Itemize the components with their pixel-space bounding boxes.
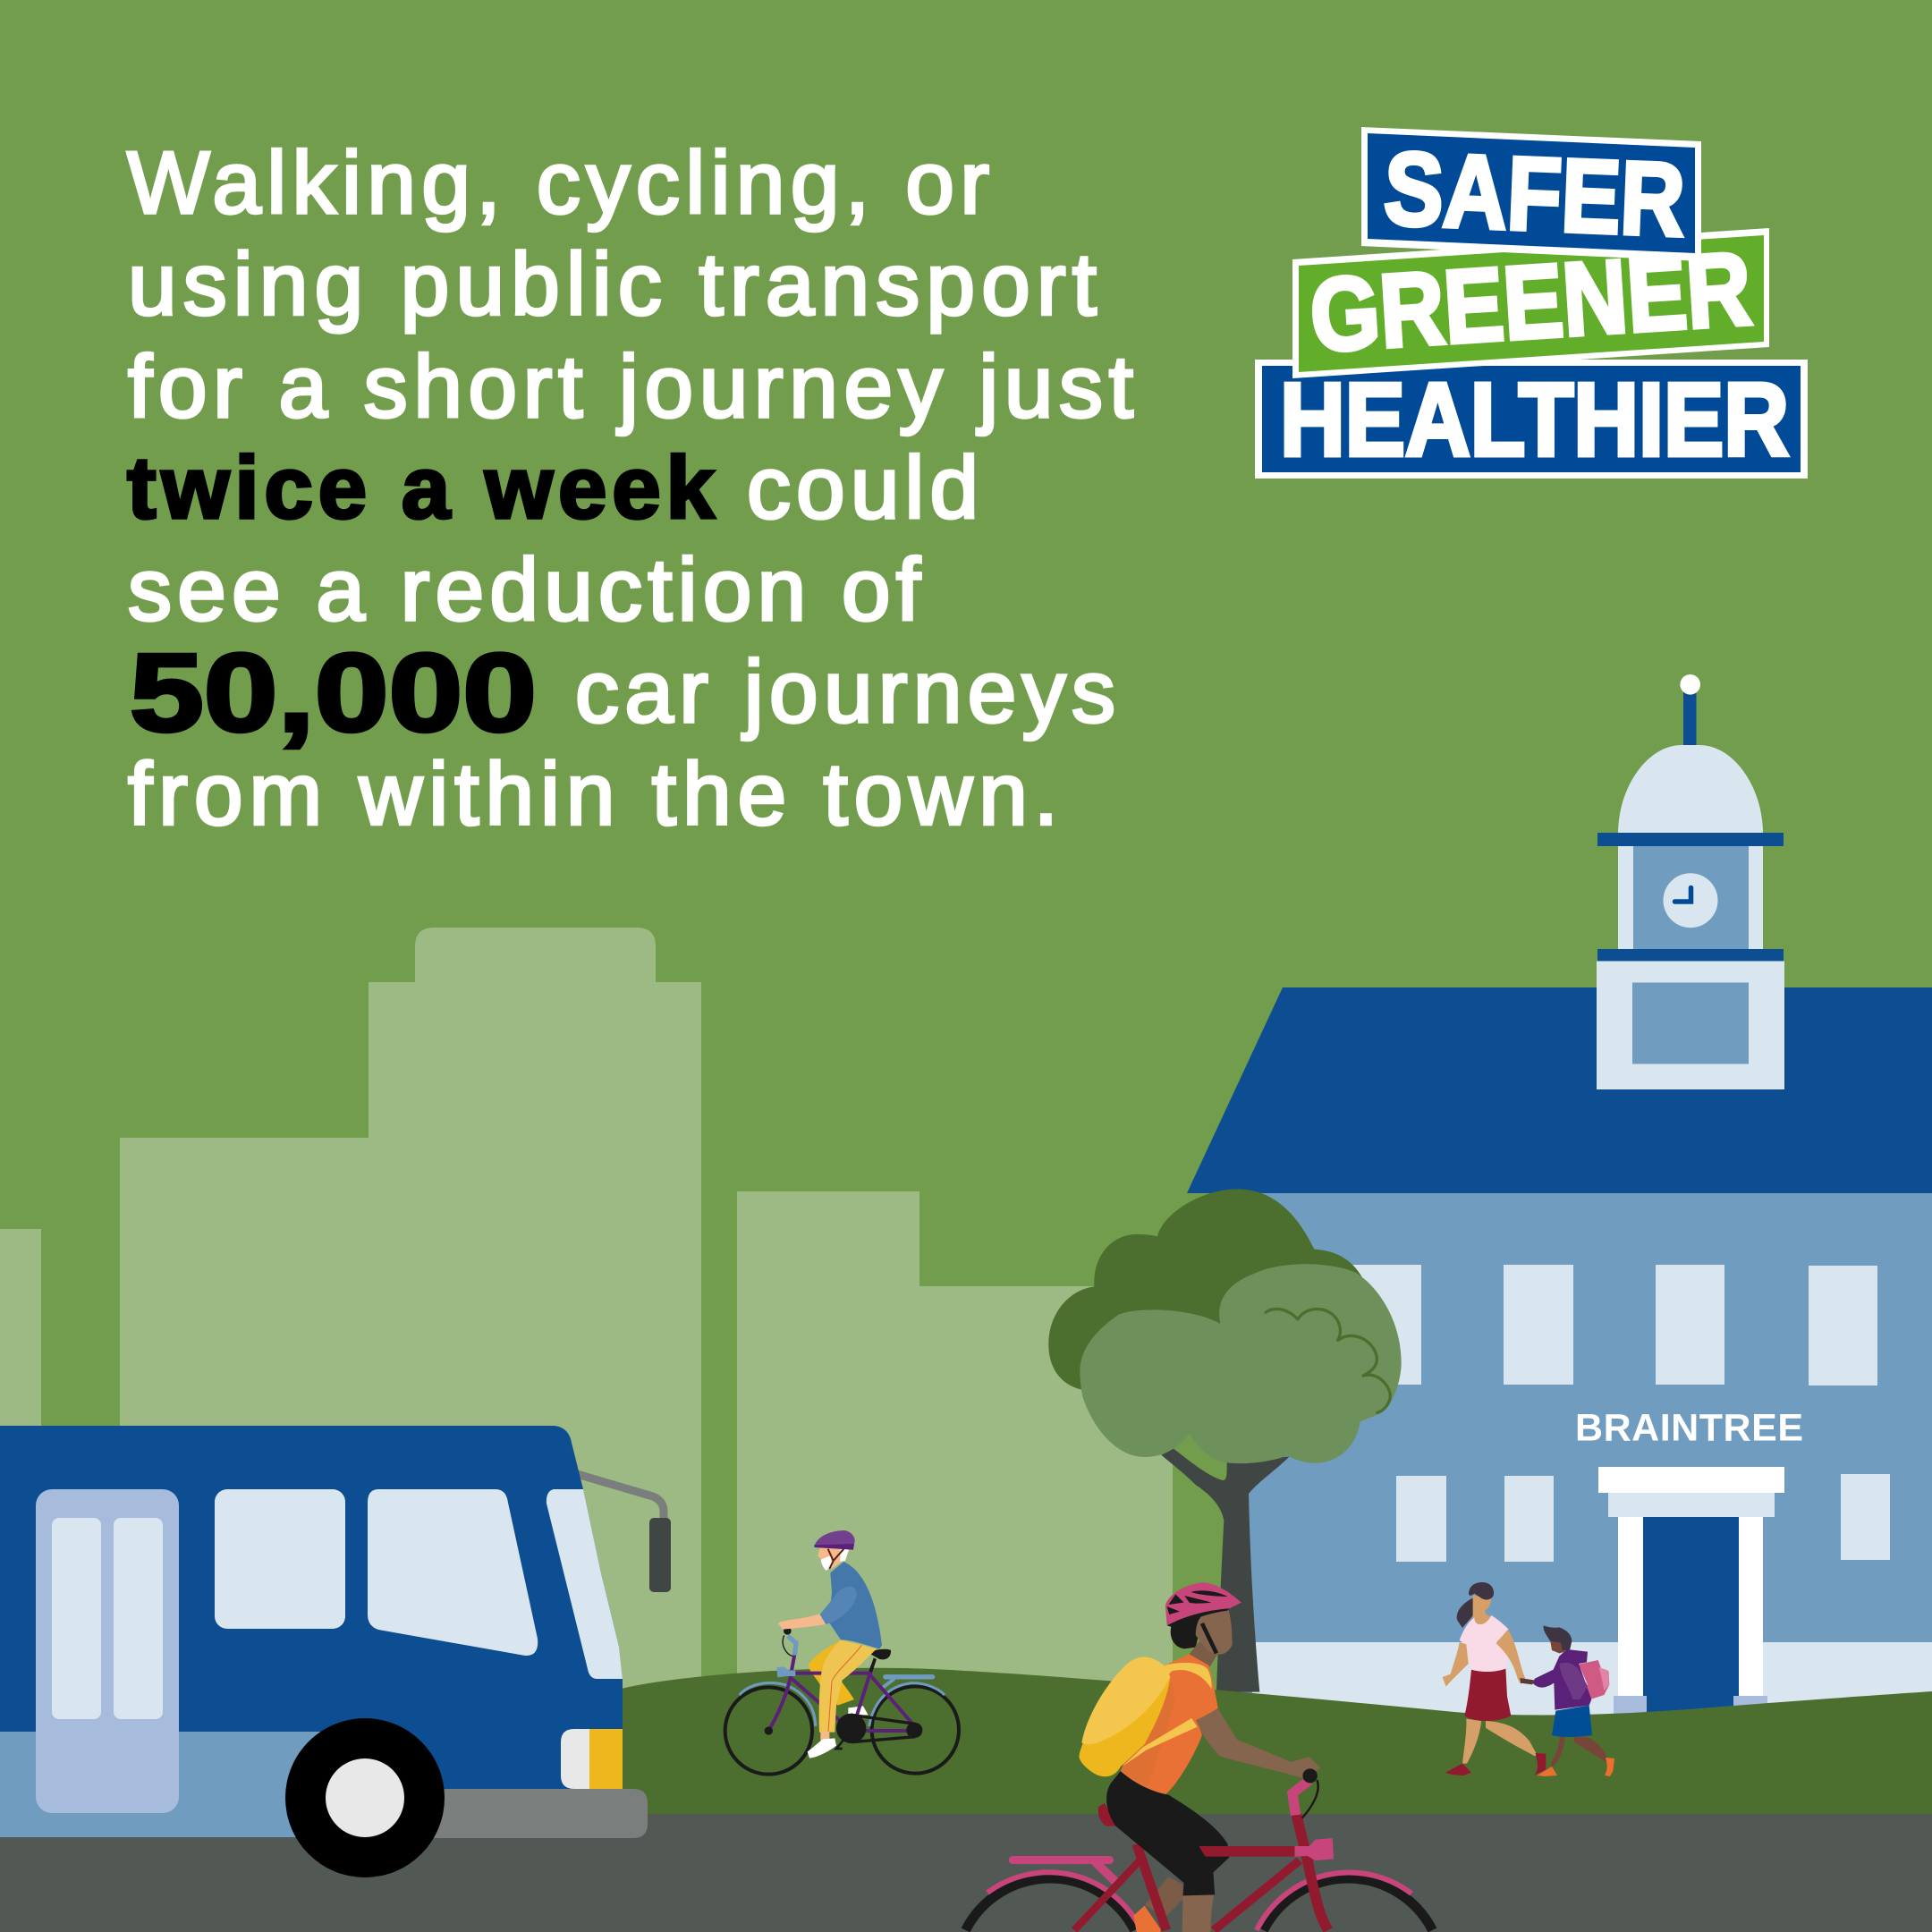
- bus mirror: [577, 1474, 671, 1592]
- clock tower dome: [1618, 745, 1763, 834]
- bike fork and handlebar: [1292, 1780, 1328, 1930]
- logo banner: greener: GREENER: [1307, 230, 1754, 374]
- bike saddle: [869, 1649, 891, 1673]
- logo banner: safer: SAFER: [1382, 130, 1687, 258]
- grip: [1302, 1768, 1318, 1783]
- bike fenders and rack: [740, 1676, 945, 1726]
- building wall: [1239, 1193, 1932, 1730]
- background city skyline: [0, 928, 1173, 1816]
- bike fenders: [987, 1872, 1411, 1930]
- far shoe: [1133, 1906, 1160, 1932]
- roof: [1187, 987, 1932, 1193]
- near leg: [1182, 1894, 1214, 1932]
- ankle: [820, 1732, 829, 1741]
- bus door: [36, 1489, 179, 1813]
- near leg: [819, 1640, 877, 1733]
- backpack: [1079, 1657, 1212, 1776]
- bike saddle: [1098, 1803, 1117, 1826]
- road: [0, 1814, 1932, 1932]
- light foliage: [1080, 1264, 1402, 1463]
- headline line 7: from within the town.: [128, 744, 1058, 843]
- bus headlight: [561, 1729, 623, 1789]
- face: [1196, 1609, 1233, 1655]
- trouser seam: [828, 1645, 861, 1732]
- foliage outline detail: [1266, 1309, 1390, 1412]
- cyclist in background: [725, 1530, 959, 1775]
- far leg: [1145, 1877, 1182, 1917]
- bus wheel: [285, 1718, 445, 1877]
- lower windows: [1396, 1474, 1890, 1562]
- headline line 3: for a short journey just: [128, 337, 1133, 436]
- building name: BRAINTREE: [1575, 1406, 1803, 1449]
- arm: [1196, 1709, 1320, 1778]
- sleeve: [820, 1587, 857, 1624]
- shorts: [1106, 1771, 1229, 1895]
- helmet strap: [1202, 1623, 1216, 1653]
- emphasis: twice a week: twice a week: [127, 438, 715, 537]
- bus windscreen: [547, 1489, 623, 1679]
- grass hill: [617, 1668, 1932, 1825]
- bus front window: [368, 1489, 538, 1656]
- helmet: [1165, 1582, 1241, 1628]
- bike drivetrain: [765, 1714, 922, 1749]
- tree trunk: [1161, 1448, 1290, 1692]
- emphasis: 50,000: 50,000: [130, 631, 537, 755]
- headline line 1: Walking, cycling, or: [127, 133, 989, 232]
- dark foliage: [1048, 1189, 1364, 1389]
- icon: clock: [1664, 873, 1717, 928]
- woman and child walking: [1443, 1582, 1614, 1776]
- tree: [1048, 1189, 1402, 1692]
- bus lower stripe: [0, 1732, 340, 1837]
- near shoe: [808, 1738, 836, 1758]
- entrance: [1598, 1467, 1784, 1723]
- bike rack: [1009, 1856, 1115, 1882]
- rider and bike frame: [1009, 1582, 1334, 1932]
- headline text: [127, 133, 1133, 843]
- headline line 2: using public transport: [128, 234, 1097, 333]
- bike frame tubes: [1074, 1844, 1300, 1930]
- headline line 6 end: car journeys: [575, 642, 1115, 741]
- bike frame: [768, 1655, 915, 1731]
- headline line 5: see a reduction of: [128, 540, 921, 639]
- clock tower body: [1597, 833, 1784, 1089]
- cyclist in foreground: [966, 1582, 1433, 1932]
- bus body: [0, 1426, 623, 1789]
- neck: [1190, 1640, 1218, 1666]
- logo banner: healthier: HEALTHIER: [1280, 361, 1789, 478]
- helmet: [814, 1530, 855, 1550]
- far shoe: [848, 1706, 869, 1715]
- town hall building: [1187, 674, 1932, 1732]
- bike wheels: [966, 1878, 1433, 1930]
- clock tower spire: [1680, 674, 1700, 748]
- bike handlebar: [776, 1627, 796, 1677]
- bike wheels: [725, 1686, 959, 1775]
- building plinth: [1252, 1642, 1932, 1732]
- shirt: [1121, 1654, 1218, 1794]
- arm: [778, 1614, 826, 1630]
- hair: [1171, 1613, 1204, 1648]
- bike head box: [1294, 1838, 1334, 1860]
- bus bumper: [429, 1789, 648, 1838]
- far leg: [809, 1640, 854, 1706]
- bus: [0, 1426, 671, 1877]
- headline line 4 end: could: [747, 438, 979, 537]
- upper windows: [1352, 1265, 1877, 1385]
- child: [1520, 1625, 1614, 1776]
- woman: [1443, 1582, 1546, 1775]
- bus side window: [215, 1489, 345, 1629]
- logo: safer greener healthier: [1255, 127, 1808, 479]
- torso: [829, 1562, 882, 1648]
- head: [818, 1547, 849, 1571]
- bike top tube: [1199, 1846, 1294, 1857]
